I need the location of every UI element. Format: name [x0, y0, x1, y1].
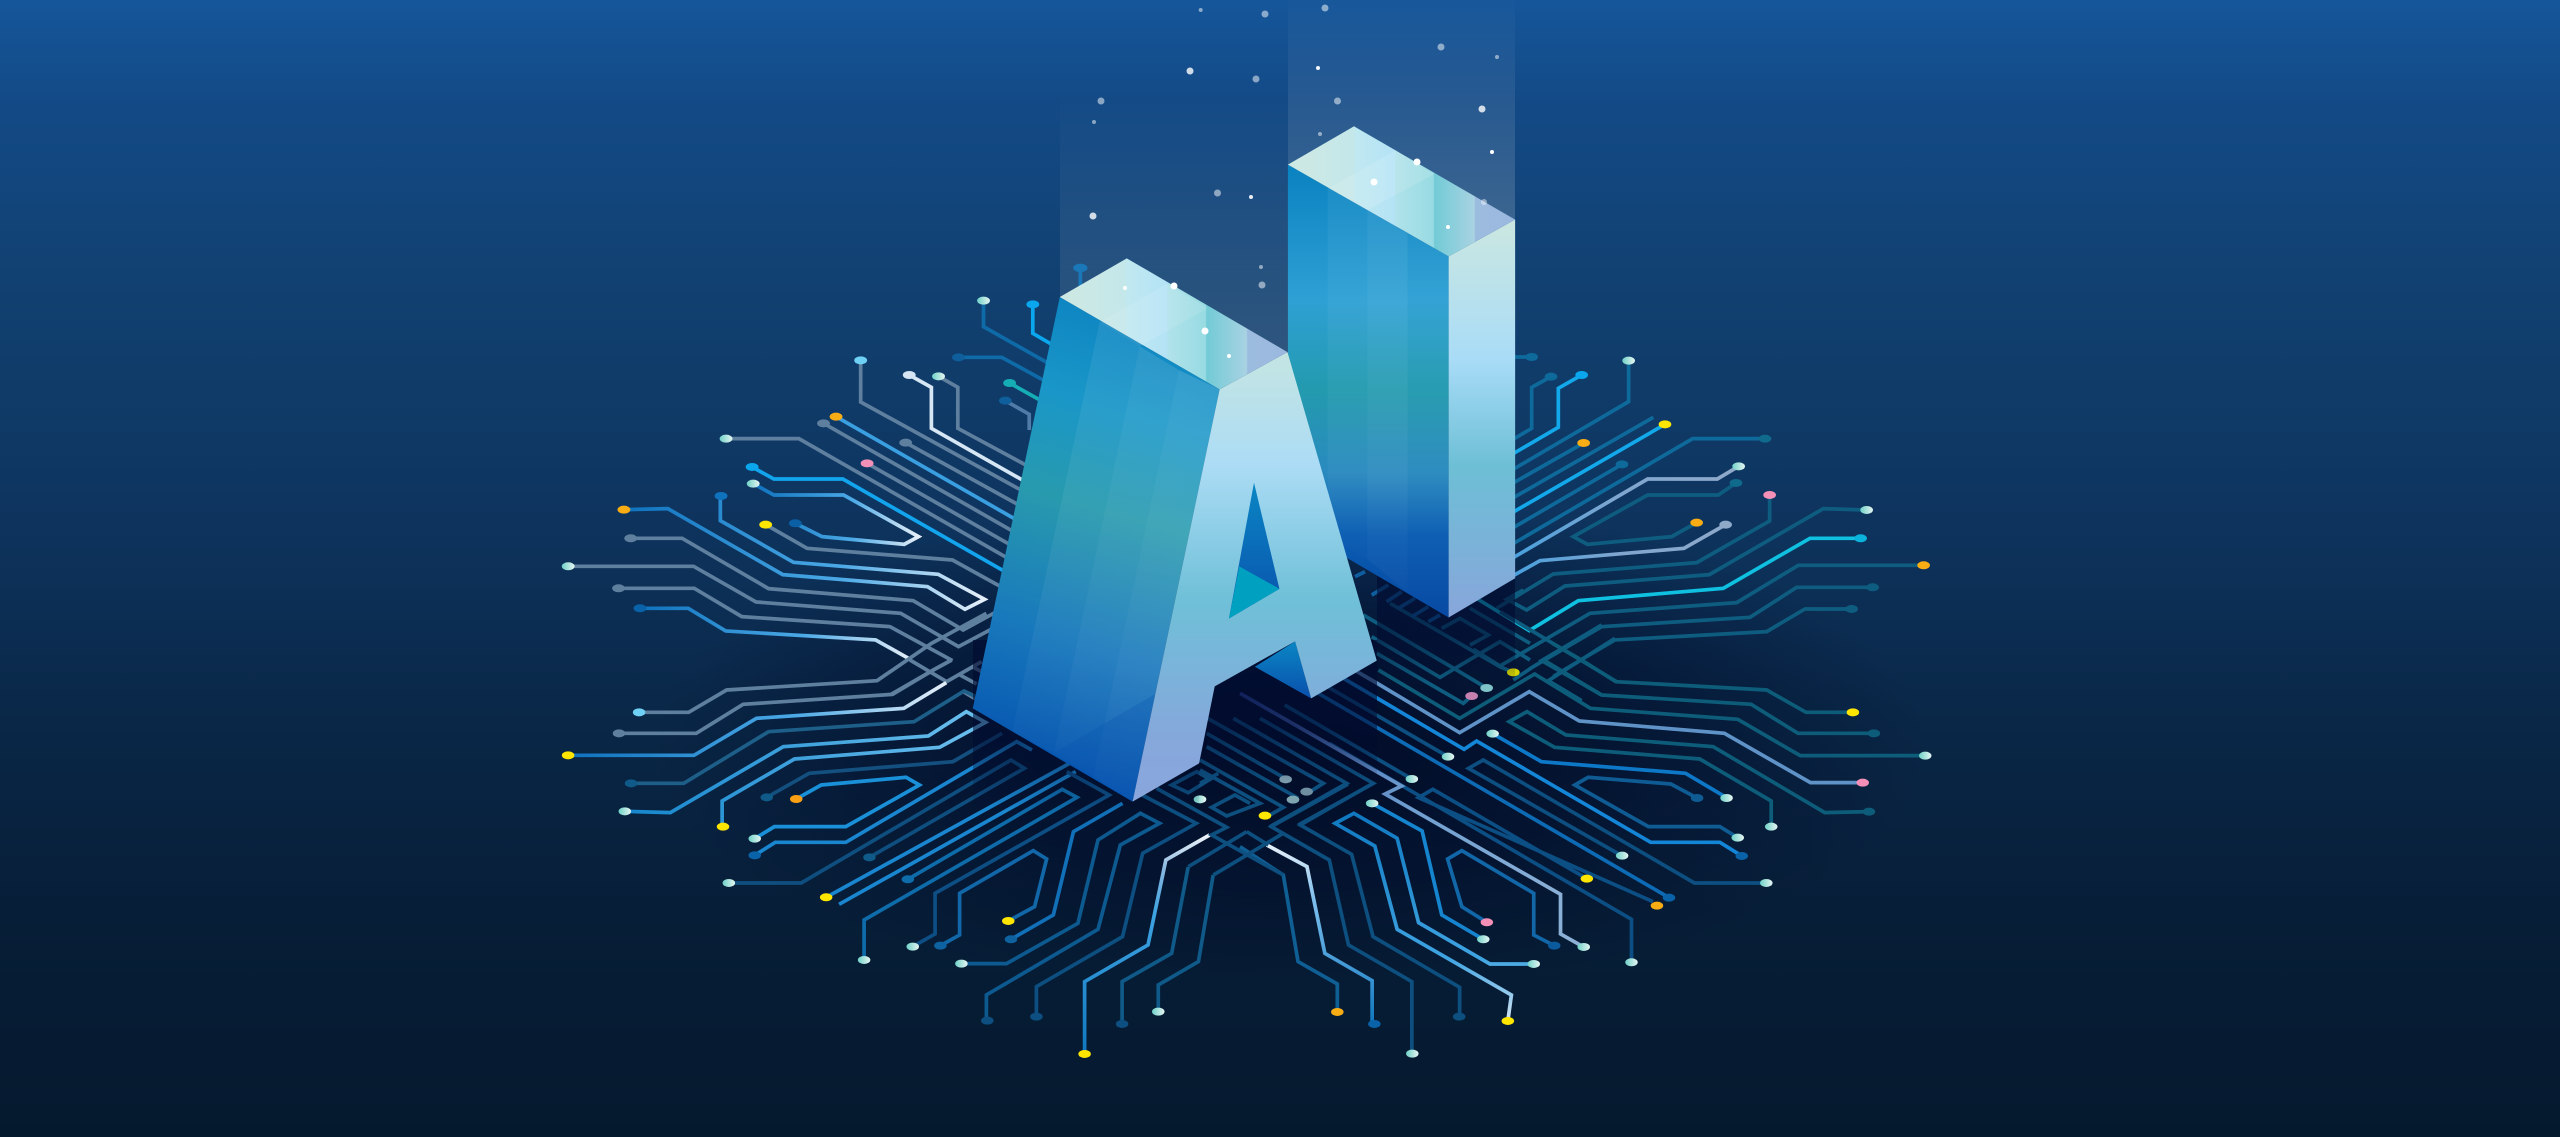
light beams above letters	[1060, 0, 1515, 360]
A: top highlight	[1100, 284, 1208, 346]
I: face strips	[1328, 187, 1449, 618]
floating particles	[1090, 4, 1499, 358]
circuit crossing: left centre	[890, 660, 982, 701]
terminal dots: lower right	[1331, 708, 1931, 1058]
terminal dots: upper left	[562, 297, 1039, 612]
I: top face	[1288, 126, 1515, 256]
A: left face	[973, 297, 1220, 802]
terminal dots: centre	[1194, 775, 1313, 820]
I: front face	[1449, 220, 1515, 618]
circuit traces: centre network	[1157, 707, 1373, 875]
A: front face	[1133, 352, 1377, 802]
A: counter opening	[1229, 483, 1279, 618]
A: inner leg side	[1255, 641, 1311, 698]
terminal dots: lower left	[562, 708, 1165, 1058]
circuit traces: lower left	[562, 613, 1213, 1058]
shadow columns beneath letters	[973, 560, 1515, 810]
A: top face	[1060, 258, 1287, 389]
terminal dots: right centre	[1465, 668, 1520, 700]
circuit traces: upper left	[562, 297, 1061, 661]
stem behind letter A	[1073, 264, 1087, 291]
letter A	[973, 258, 1377, 802]
circuit traces: right centre	[1355, 572, 1617, 703]
A: counter inner floor	[1229, 566, 1279, 618]
A: lower deep-blue facet	[1054, 689, 1163, 802]
I: left face	[1288, 165, 1449, 618]
letter I	[1288, 126, 1515, 618]
circuit traces: upper right	[1460, 353, 1930, 680]
dark glow behind circuit	[650, 495, 1930, 995]
I: top highlight	[1329, 150, 1434, 210]
A: face strips	[1012, 322, 1220, 802]
circuit traces: lower right	[1240, 643, 1931, 1058]
terminal dots: upper right	[1525, 353, 1930, 613]
